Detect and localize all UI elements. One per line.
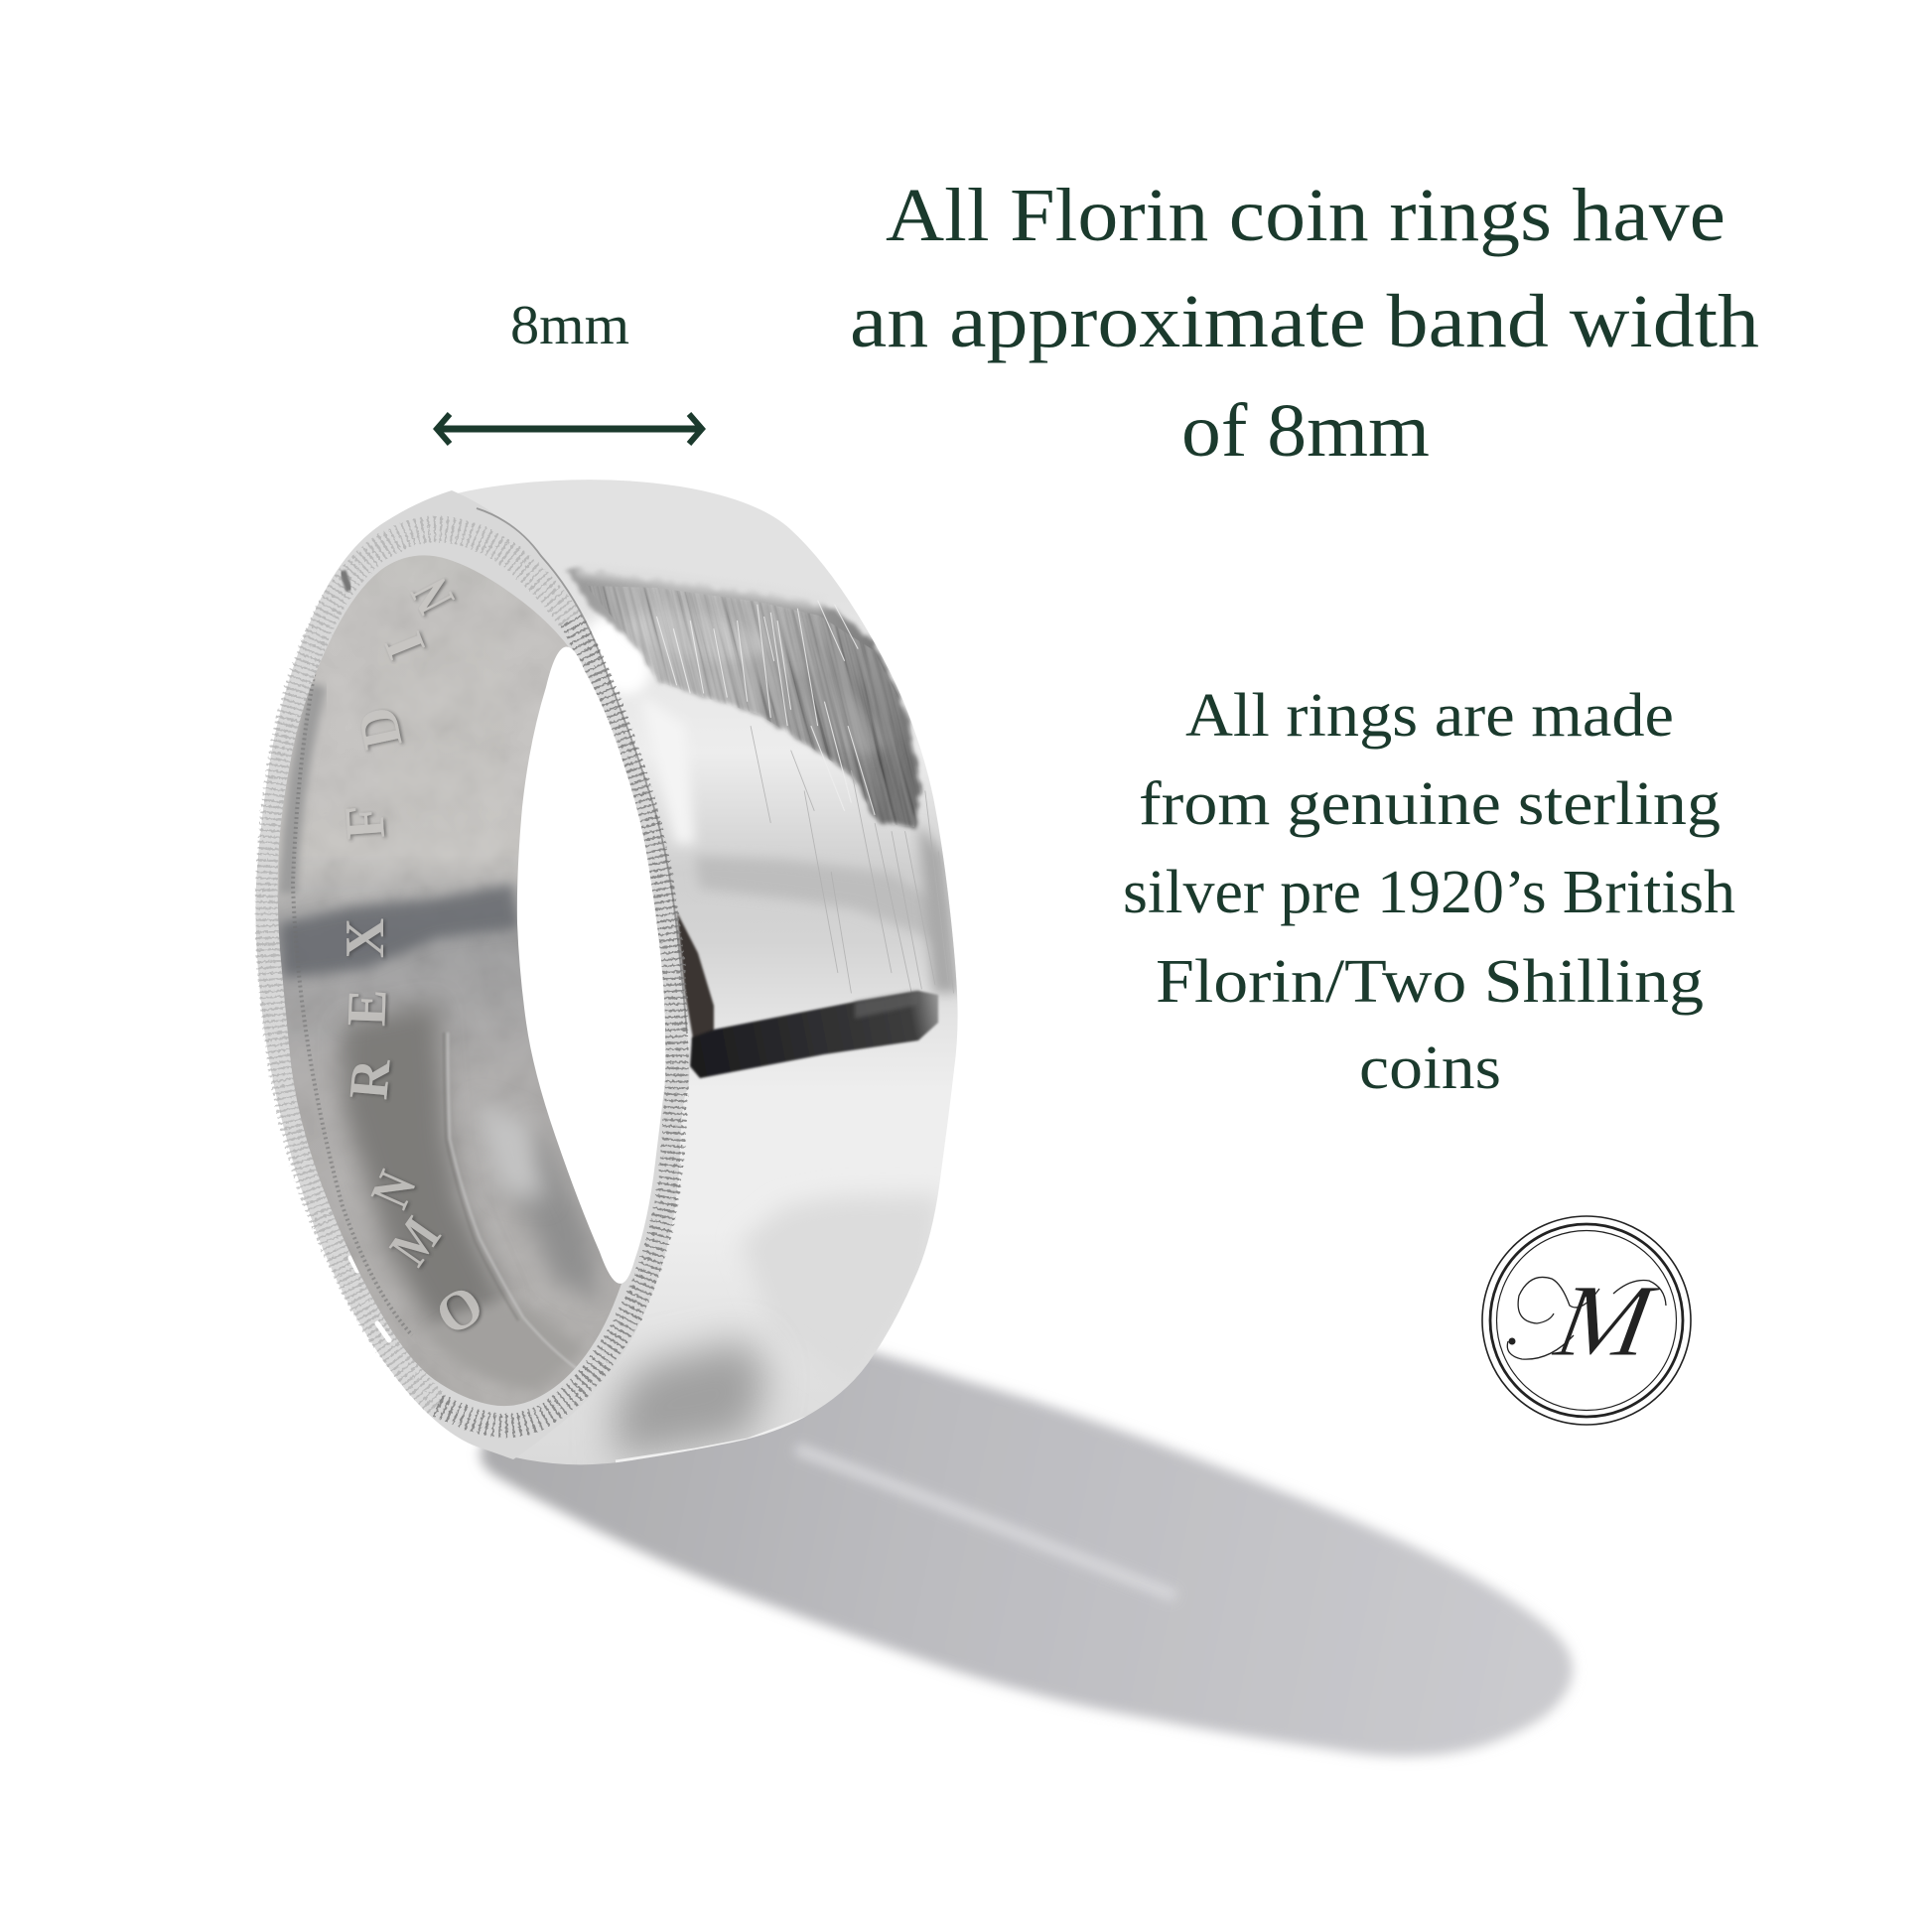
heading: band width statement: All Florin coin rings have: [886, 174, 1725, 257]
text block: materials: Florin/Two Shilling: [1156, 948, 1704, 1016]
logo: M monogram seal: M: [1540, 1264, 1672, 1378]
text block: materials: All rings are made: [1185, 682, 1674, 750]
ring outer band: [256, 480, 957, 1465]
coin lettering inside ring: D: [345, 702, 415, 754]
ring shadow: [481, 1320, 1573, 1756]
coin lettering inside ring: N: [399, 569, 467, 622]
text block: materials: silver pre 1920’s British: [1123, 859, 1735, 926]
coin lettering inside ring: I: [372, 623, 438, 667]
text block: materials: [1123, 682, 1735, 1102]
coin lettering inside ring: F: [334, 803, 397, 841]
inner ring surface: [278, 556, 621, 1406]
scratches on band: [656, 601, 954, 993]
coin lettering inside ring: [334, 569, 494, 1348]
arrow: band width measure: [437, 414, 702, 444]
coin lettering inside ring: O: [425, 1273, 494, 1348]
logo: M monogram seal: [1482, 1216, 1691, 1425]
ring centre opening: [517, 647, 665, 1284]
silver coin ring: [254, 480, 957, 1465]
heading: band width statement: of 8mm: [1181, 389, 1430, 473]
coin lettering inside ring: R: [338, 1056, 403, 1102]
coin lettering inside ring: M: [378, 1206, 452, 1276]
text block: materials: from genuine sterling: [1139, 770, 1721, 838]
heading: band width statement: [850, 174, 1759, 473]
heading: band width statement: an approximate band width: [850, 280, 1759, 363]
coin lettering inside ring: E: [336, 988, 399, 1028]
coin lettering inside ring: X: [335, 918, 396, 958]
coin lettering inside ring: N: [358, 1163, 428, 1216]
text block: materials: coins: [1359, 1035, 1501, 1102]
knurled coin rim: [256, 490, 689, 1459]
label: 8mm: 8mm: [510, 295, 629, 356]
